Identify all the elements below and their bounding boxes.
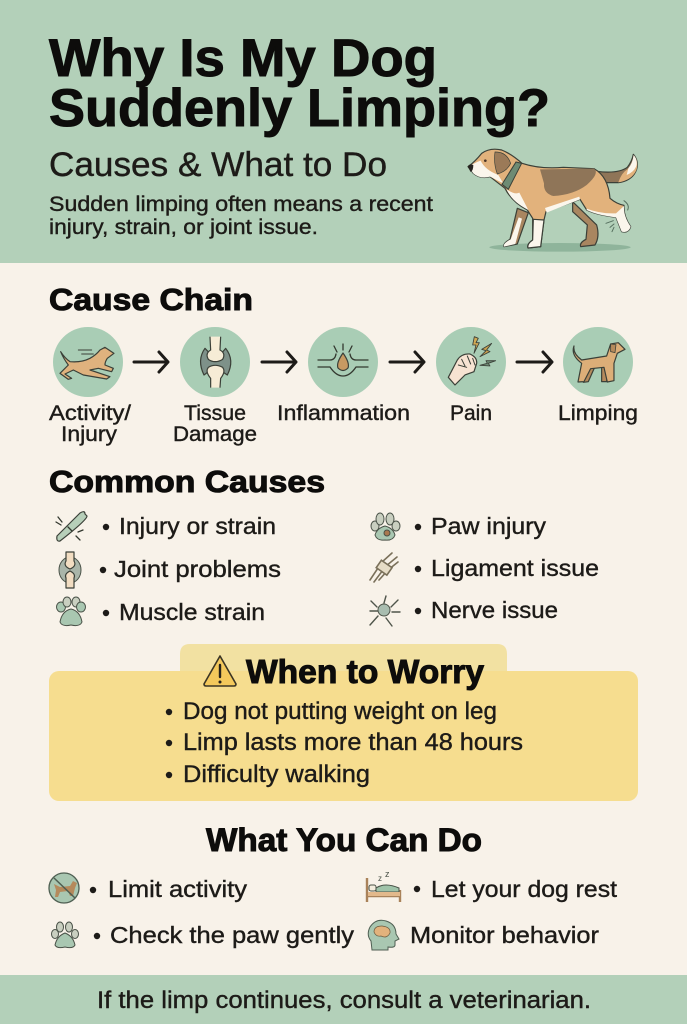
- item: muscle strain: [56, 597, 265, 626]
- step: limping: [558, 327, 638, 425]
- heading: Cause Chain: Cause Chain: [49, 282, 253, 317]
- warning list: Dog not putting weight on leg: [183, 698, 497, 725]
- label: Activity/: [49, 402, 131, 425]
- arrow: [134, 352, 168, 372]
- item: check the paw gently: Check the paw gently: [110, 922, 354, 948]
- icon: bed: z: [385, 869, 390, 879]
- title: [49, 29, 550, 138]
- arrow: [390, 352, 424, 372]
- icon: head with brain: [368, 920, 399, 950]
- label: Limping: [558, 402, 638, 425]
- label: Pain: [450, 402, 492, 425]
- icon: bed: [367, 869, 400, 902]
- item: let your dog rest: [367, 869, 617, 902]
- item: let your dog rest: Let your dog rest: [431, 876, 617, 902]
- label: [49, 402, 131, 446]
- heading: What You Can Do: What You Can Do: [206, 822, 482, 858]
- heading: Common Causes: Common Causes: [49, 464, 325, 499]
- item: monitor behavior: [368, 920, 599, 950]
- item: joint problems: [59, 552, 281, 588]
- footer text: If the limp continues, consult a veterinarian.: [97, 987, 591, 1014]
- icon: limping dog: [468, 149, 637, 252]
- item: paw injury: Paw injury: [431, 513, 546, 539]
- item: limit activity: Limit activity: [108, 876, 247, 902]
- warning list: Difficulty walking: [183, 761, 370, 788]
- intro text: Sudden limping often means a recent: [49, 192, 433, 216]
- intro text: [49, 192, 433, 239]
- step: activity/injury: [49, 327, 131, 446]
- warning list: [166, 698, 523, 788]
- label: Inflammation: [277, 402, 410, 425]
- step: tissue damage: [173, 327, 257, 446]
- label: Tissue: [184, 402, 246, 425]
- icon: joint: [59, 552, 81, 588]
- label: Injury: [61, 423, 118, 446]
- step: inflammation: [277, 327, 410, 425]
- header panel: [0, 0, 687, 263]
- item: injury or strain: Injury or strain: [119, 513, 276, 539]
- step: pain: [436, 327, 506, 425]
- icon: warning triangle: [204, 656, 236, 686]
- item: injury or strain: [56, 512, 276, 541]
- item: joint problems: Joint problems: [114, 556, 281, 582]
- arrow: [262, 352, 296, 372]
- icon: strained bone: [56, 512, 87, 541]
- icon: injured paw: [371, 513, 400, 540]
- item: monitor behavior: Monitor behavior: [410, 922, 599, 948]
- arrow: [517, 352, 552, 372]
- icon: nerve cell: [370, 596, 400, 626]
- item: nerve issue: [370, 596, 558, 626]
- common causes list: [56, 512, 599, 626]
- title: Why Is My Dog: [49, 29, 437, 88]
- icon: bed: z: [378, 874, 382, 883]
- item: paw injury: [371, 513, 546, 540]
- panel: when to worry: [49, 644, 638, 801]
- item: limit activity: [49, 873, 247, 903]
- item: muscle strain: Muscle strain: [119, 599, 265, 625]
- label: Damage: [173, 423, 257, 446]
- heading: When to Worry: [246, 653, 485, 690]
- item: ligament issue: [370, 553, 599, 582]
- item: ligament issue: Ligament issue: [431, 555, 599, 581]
- title: Suddenly Limping?: [49, 79, 550, 138]
- footer band: [0, 975, 687, 1024]
- icon: no-activity dog: [49, 873, 79, 903]
- icon: paw: [56, 597, 86, 626]
- warning list: Limp lasts more than 48 hours: [183, 729, 523, 756]
- label: [173, 402, 257, 446]
- subtitle: Causes & What to Do: [49, 146, 387, 184]
- item: nerve issue: Nerve issue: [431, 597, 558, 623]
- intro text: injury, strain, or joint issue.: [49, 215, 318, 239]
- icon: ligament: [370, 553, 398, 582]
- what you can do list: [49, 869, 617, 950]
- icon: paw: [52, 922, 78, 948]
- cause chain diagram: [49, 327, 638, 446]
